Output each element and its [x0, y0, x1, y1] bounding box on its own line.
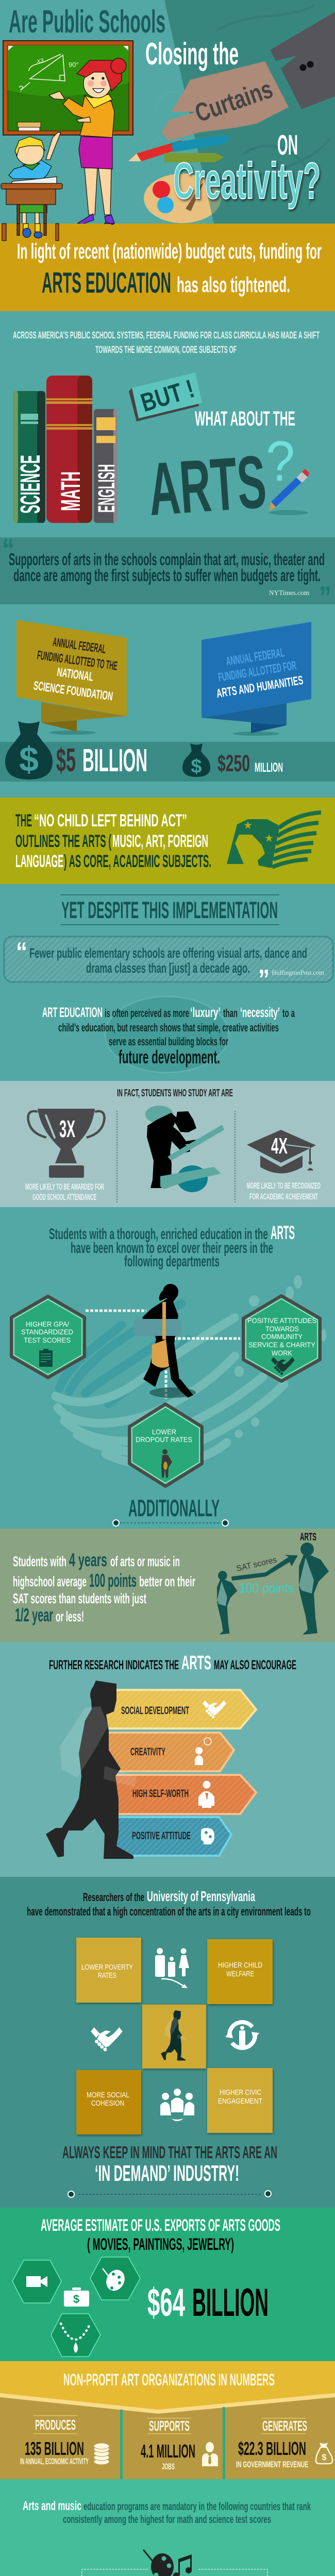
- card: higher child welfare: HIGHER CHILD: [218, 1961, 262, 1970]
- icon: desk legs over banner: [2, 222, 114, 241]
- icon: positive attitudes hexagon: COMMUNITY: [261, 1332, 303, 1341]
- icon: briefcase: [64, 2287, 89, 2307]
- icon: positive attitudes hexagon: POSITIVE ATTITUDES: [247, 1316, 316, 1325]
- text: line 2: MUSIC, ART, FOREIGN: [112, 832, 208, 851]
- icon: child silhouette: [145, 1106, 224, 1192]
- panel: enriched education: ARTS: [271, 1222, 295, 1243]
- card: higher civic engagement: HIGHER CIVIC: [220, 2088, 261, 2097]
- label: sat scores: SAT scores: [236, 1555, 278, 1573]
- icon: higher gpa hexagon: [11, 1296, 85, 1378]
- icon: positive attitudes hexagon: SERVICE & CHARITY: [248, 1341, 316, 1349]
- icon: camera hexagon: [12, 2260, 61, 2303]
- dotted connectors: [86, 1311, 240, 1399]
- panel: exports: [0, 2208, 335, 2361]
- card: higher child welfare: [207, 1939, 273, 2004]
- icon: small money bag: [182, 743, 210, 777]
- text: line 2: OUTLINES THE ARTS (: [15, 832, 111, 851]
- icon: chalkboard: 90°: [69, 61, 79, 69]
- card: higher civic engagement: [207, 2068, 273, 2133]
- text: line 4: 1/2 year: [15, 1604, 53, 1625]
- text: line 3: SAT scores than students with just: [13, 1590, 146, 1606]
- icon: teacher: [49, 58, 126, 225]
- text: line 1: “NO CHILD LEFT BEHIND ACT”: [34, 811, 187, 831]
- text: source: HuffingtonPost.com: [272, 969, 324, 976]
- column: produces: [20, 2415, 89, 2466]
- icon: open quote: “: [2, 533, 14, 567]
- icon: family with arrow: [155, 1948, 189, 1988]
- icon: positive attitudes hexagon: TOWARDS: [265, 1325, 299, 1333]
- icon: math book: MATH: [56, 471, 86, 511]
- panel: header: [1, 0, 335, 235]
- text: line 2: 100 points: [89, 1570, 137, 1591]
- panel: no child left behind: [0, 798, 335, 884]
- panel: science foundation ribbon: FUNDING ALLOTTED TO THE: [36, 648, 119, 673]
- text: line 1: than: [223, 1007, 238, 1020]
- icon: higher gpa hexagon: HIGHER GPA/: [26, 1320, 69, 1328]
- panel: science foundation ribbon: [16, 620, 127, 735]
- panel: huffington quote: [4, 937, 333, 994]
- heading: additionally: ADDITIONALLY: [128, 1495, 220, 1521]
- panel: funding amounts: [0, 721, 335, 782]
- tag: social development: SOCIAL DEVELOPMENT: [121, 1705, 189, 1717]
- card: lower poverty: LOWER POVERTY: [81, 1963, 133, 1972]
- panel: further research: [0, 1642, 335, 1877]
- text: line 1: Arts and music: [23, 2499, 81, 2513]
- panel: students who study art: [0, 1081, 335, 1207]
- heading: IN FACT, STUDENTS WHO STUDY ART ARE: [117, 1088, 233, 1099]
- icon: chalkboard: ?: [19, 84, 23, 94]
- dashed connectors: [82, 2569, 267, 2576]
- icon: money bag outline: [316, 2443, 332, 2464]
- tag: creativity: CREATIVITY: [130, 1746, 165, 1758]
- stat: 250 million: MILLION: [255, 760, 283, 775]
- divider left: [116, 1111, 118, 1202]
- tag: positive attitude: POSITIVE ATTITUDE: [132, 1830, 191, 1842]
- icon: pencil: [269, 469, 309, 515]
- icon: flag silhouette: [227, 812, 321, 868]
- panel: non-profit organizations: [0, 2361, 335, 2479]
- tag: creativity: [106, 1733, 234, 1771]
- icon: palette: [144, 174, 221, 223]
- text: recognized: [247, 1181, 321, 1201]
- icon: palette hexagon: [90, 2257, 140, 2300]
- icon: group of people: [160, 2089, 194, 2121]
- icon: person cycle: [225, 2022, 259, 2048]
- stat: five billion: BILLION: [82, 743, 147, 778]
- card: lower poverty: RATES: [98, 1971, 116, 1980]
- icon: math book: [46, 376, 92, 523]
- icon: english book: ENGLISH: [93, 464, 120, 513]
- column: supports: JOBS: [162, 2462, 175, 2471]
- icon: palette and music notes: [143, 2550, 192, 2576]
- text: science foundation: SCIENCE FOUNDATION: [32, 679, 114, 704]
- tag: high self-worth: [106, 1775, 256, 1814]
- text: line 4: or less!: [56, 1608, 84, 1624]
- icon: student at desk: [1, 132, 62, 235]
- text: line 1: ‘luxury’: [190, 1005, 221, 1020]
- text: heading line 3: following departments: [124, 1253, 220, 1270]
- text: line 3: [15, 852, 211, 871]
- stat: five billion: [56, 741, 147, 778]
- panel: enriched education: [11, 1222, 326, 1486]
- text: line 2: [13, 1570, 195, 1591]
- panel: core subjects: [13, 330, 320, 531]
- heading: FURTHER RESEARCH INDICATES THE: [49, 1658, 179, 1672]
- icon: walking woman: [133, 1284, 196, 1398]
- text: line 1: ‘necessity’: [240, 1005, 280, 1020]
- text: line 3: serve as essential building blocks for: [109, 1035, 228, 1048]
- tag: social development: [106, 1690, 256, 1728]
- text: awarded: GOOD SCHOOL ATTENDANCE: [32, 1192, 96, 1202]
- text: line 2: better on their: [139, 1573, 195, 1589]
- label: arts: ARTS: [300, 1531, 316, 1543]
- text: line 1: [42, 1005, 295, 1020]
- card: more social cohesion: [76, 2070, 141, 2134]
- icon: briefcase: $: [73, 2293, 79, 2306]
- panel: budget cuts banner: [0, 222, 335, 311]
- icon: large money bag: $: [19, 740, 39, 779]
- text: line 1: of arts or music in: [110, 1553, 180, 1569]
- icon: lower dropout hexagon: DROPOUT RATES: [136, 1435, 192, 1444]
- icon: graduation cap: 4X: [271, 1133, 288, 1159]
- icon: open quote: “: [16, 937, 27, 967]
- icon: science book: SCIENCE: [15, 455, 46, 514]
- text: line 1: [15, 811, 187, 831]
- swoosh stripes: [56, 1275, 326, 1465]
- card: center student: [142, 2005, 206, 2069]
- icon: trophy: [28, 1109, 104, 1178]
- icon: pencils: [128, 135, 231, 162]
- heading: [49, 1652, 296, 1674]
- text: line 1: ART EDUCATION: [42, 1005, 103, 1020]
- heading: ARTS: [181, 1652, 211, 1674]
- text: line 1: Students with: [13, 1553, 66, 1569]
- text: line 1: is often perceived as more: [105, 1007, 189, 1020]
- panel: nytimes quote: [0, 533, 335, 614]
- text: line 1: 4 years: [69, 1549, 107, 1570]
- icon: positive attitudes hexagon: WORK: [272, 1349, 293, 1357]
- icon: positive attitudes hexagon: [243, 1296, 320, 1381]
- stat: 64 billion: $64: [147, 2281, 185, 2325]
- panel: art education: [42, 996, 295, 1073]
- icon: big student: [299, 1543, 329, 1635]
- stat: 250 million: $250: [217, 750, 250, 776]
- text: national: NATIONAL: [56, 665, 94, 684]
- text: line 2: highschool average: [13, 1573, 87, 1589]
- icon: large money bag: [5, 721, 53, 779]
- icon: lower dropout hexagon: [129, 1404, 202, 1486]
- callout: but: [129, 372, 202, 421]
- callout: but: BUT !: [138, 374, 197, 417]
- stat: 64 billion: [147, 2281, 269, 2325]
- column: produces: PRODUCES: [35, 2417, 76, 2433]
- icon: trophy: 3X: [59, 1115, 75, 1142]
- text: awarded: MORE LIKELY TO BE AWARDED FOR: [25, 1182, 104, 1192]
- text: line 1: to a: [282, 1007, 295, 1020]
- icon: hand pulling curtain: [161, 12, 335, 141]
- icon: close quote: ”: [319, 581, 331, 614]
- text: researchers: University of Pennsylvania: [147, 1888, 255, 1904]
- tag: positive attitude: [106, 1817, 231, 1856]
- icon: necklace hexagon: [51, 2314, 100, 2357]
- icon: money bag outline: $: [322, 2452, 327, 2462]
- card: higher civic engagement: ENGAGEMENT: [218, 2097, 262, 2106]
- panel: mandatory countries: [0, 2479, 335, 2576]
- column: supports: SUPPORTS: [149, 2418, 190, 2434]
- icon: growth arrow: [231, 1555, 298, 1581]
- icon: walking student silhouette: [46, 1681, 137, 1859]
- text: line 1: [13, 1549, 180, 1570]
- panel: science foundation ribbon: ANNUAL FEDERAL: [52, 635, 107, 656]
- icon: higher gpa hexagon: TEST SCORES: [24, 1336, 71, 1344]
- icon: chalkboard: [3, 41, 133, 135]
- connector: [68, 2191, 271, 2197]
- title: are public schools: Are Public Schools: [9, 4, 165, 40]
- icon: lower dropout hexagon: LOWER: [152, 1428, 176, 1436]
- panel: university of pennsylvania: [0, 1877, 335, 2208]
- text: line 3: LANGUAGE: [15, 852, 63, 871]
- icon: close quote: ”: [258, 964, 270, 994]
- card: more social cohesion: MORE SOCIAL: [87, 2091, 129, 2099]
- icon: question mark: ?: [266, 430, 295, 493]
- text: researchers: Researchers of the: [83, 1891, 144, 1904]
- icon: graduation cap: [247, 1130, 316, 1174]
- card: more social cohesion: COHESION: [91, 2099, 124, 2108]
- text: line 1: [23, 2499, 311, 2513]
- dark swirl backdrop: [149, 0, 335, 224]
- title: curtains: Curtains: [191, 74, 276, 128]
- panel: non-profit organizations: IN ANNUAL, ECONOMIC ACTIVITY: [20, 2456, 89, 2466]
- panel: arts and humanities ribbon: [202, 622, 311, 736]
- card: lower poverty: [76, 1938, 141, 2003]
- heading: additionally: [113, 1495, 228, 1526]
- icon: coins: [94, 2443, 109, 2465]
- text: source: NYTimes.com: [269, 589, 309, 597]
- icon: chalkboard: x3: [37, 57, 44, 64]
- column: supports: 4.1 MILLION: [141, 2441, 195, 2462]
- card: higher child welfare: WELFARE: [226, 1970, 254, 1978]
- icon: small money bag: $: [191, 756, 202, 777]
- column: supports: [141, 2418, 195, 2471]
- column: generates: [236, 2418, 308, 2469]
- icon: higher gpa hexagon: STANDARDIZED: [21, 1328, 73, 1336]
- label: 100 points: 100 points: [239, 1580, 294, 1596]
- icon: small student: [217, 1571, 237, 1635]
- text: researchers: [83, 1888, 255, 1904]
- icon: person: [202, 2442, 218, 2466]
- panel: budget cuts banner: ARTS EDUCATION: [42, 266, 171, 299]
- tag: high self-worth: HIGH SELF-WORTH: [132, 1788, 189, 1800]
- icon: handshake: [91, 2027, 123, 2051]
- divider right: [234, 1111, 236, 1202]
- text: awarded: [25, 1182, 104, 1202]
- text: line 1: THE: [15, 811, 32, 831]
- text: future development: future development.: [119, 1046, 220, 1067]
- title: closing the: Closing the: [145, 37, 239, 71]
- column: produces: 135 BILLION: [25, 2438, 84, 2459]
- stat: five billion: $5: [56, 741, 76, 778]
- panel: sat scores: [0, 1529, 335, 1642]
- panel: header: ON: [277, 129, 298, 161]
